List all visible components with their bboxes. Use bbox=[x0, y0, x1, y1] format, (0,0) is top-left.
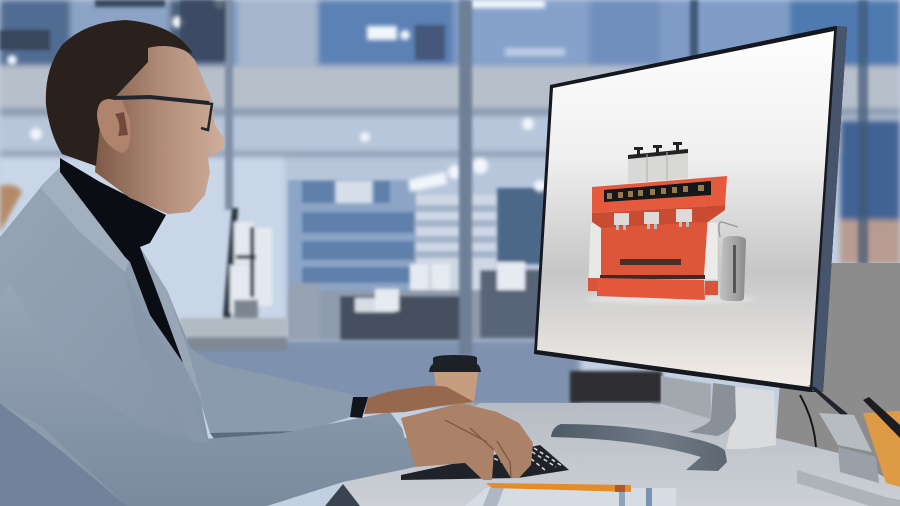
monitor foot bracket bbox=[808, 385, 848, 415]
monitor screen bbox=[537, 31, 834, 387]
neck and face bbox=[95, 38, 225, 214]
dark gap under upper arm bbox=[210, 431, 300, 440]
display strip bbox=[604, 181, 711, 202]
man bbox=[0, 20, 533, 506]
machine top housing bbox=[592, 176, 727, 213]
machine body bbox=[601, 215, 708, 275]
dispensers bbox=[614, 209, 692, 230]
lower torso shadow bbox=[0, 403, 127, 506]
turtleneck bbox=[60, 158, 183, 363]
pencil bbox=[486, 483, 631, 492]
desk bbox=[343, 403, 900, 506]
monitor stand bbox=[551, 383, 776, 471]
keyboard bbox=[401, 445, 569, 480]
background lights bbox=[7, 0, 565, 192]
shirt cuff bbox=[401, 424, 409, 438]
drip tray bbox=[588, 275, 718, 300]
watch strap bbox=[350, 397, 368, 418]
rear hand bbox=[364, 386, 474, 414]
shadow bbox=[585, 294, 755, 304]
front hand bbox=[401, 403, 533, 480]
grey fabric partition bbox=[661, 263, 900, 506]
ear bbox=[97, 99, 131, 153]
monitor bezel bbox=[534, 26, 847, 392]
syrup bottles bbox=[628, 142, 688, 183]
hair bbox=[46, 20, 193, 166]
blurred person behind bbox=[0, 185, 22, 232]
jacket torso bbox=[0, 167, 267, 506]
pencil holder and desk tray bbox=[797, 397, 900, 506]
drip slot bbox=[620, 259, 681, 265]
lapel bbox=[40, 167, 130, 272]
background shelving bbox=[288, 180, 553, 340]
3D machine on screen bbox=[585, 142, 755, 304]
dark gap under desk edge bbox=[325, 484, 360, 506]
coffee cup bbox=[429, 355, 481, 404]
upper arm bbox=[186, 345, 355, 433]
forearm sleeve bbox=[0, 283, 415, 506]
eyeglasses bbox=[113, 97, 212, 130]
notepaper bbox=[465, 488, 676, 506]
water tank bbox=[719, 222, 746, 301]
monitor bbox=[534, 26, 848, 471]
clear side panels bbox=[588, 222, 603, 290]
poles and dark forms bbox=[0, 0, 868, 403]
